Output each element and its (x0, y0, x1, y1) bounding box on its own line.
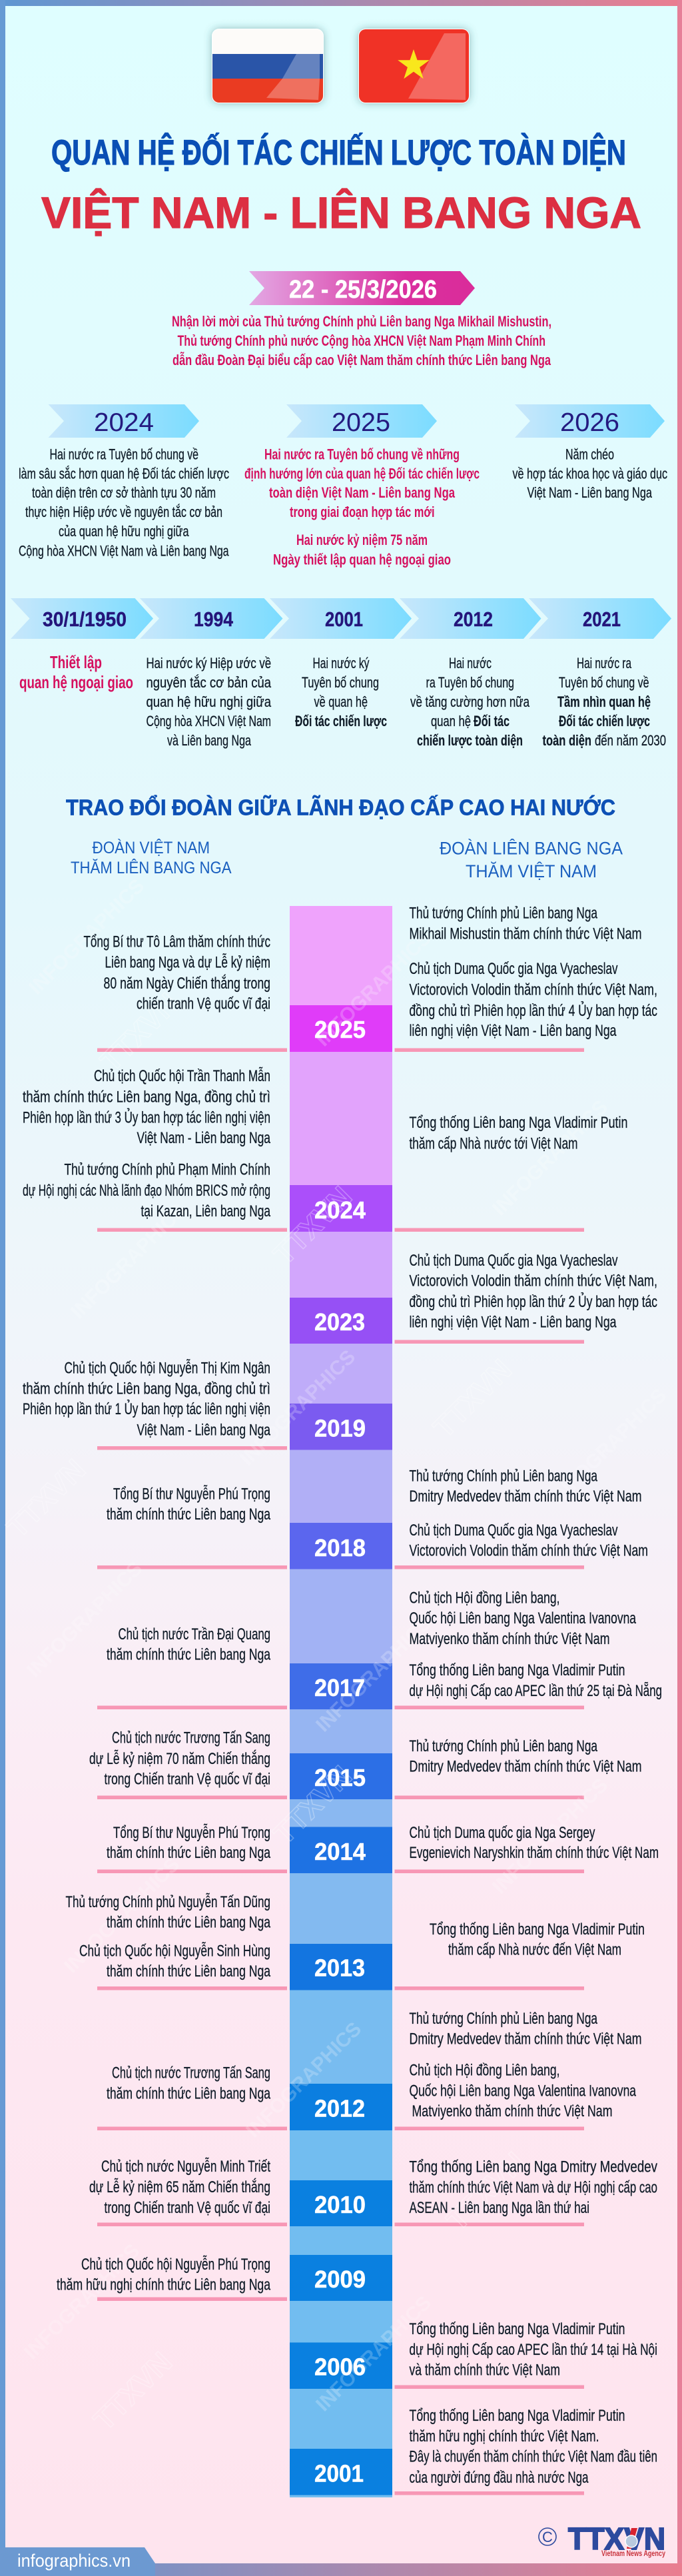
year 2001 (290, 2389, 392, 2497)
left visits: 2017: Chủ tịch nước Trần Đại Quang (119, 1625, 270, 1643)
left visits: 2024: Thủ tướng Chính phủ Phạm Minh Chính (64, 1160, 270, 1179)
icon: flag of Russia (212, 29, 324, 103)
panel: 2024: Cộng hòa XHCN Việt Nam và Liên bang Nga (19, 542, 229, 560)
watermarks: TTXVN (440, 2146, 531, 2237)
left visits: 2024: Chủ tịch Quốc hội Trần Thanh Mẫn (94, 1067, 270, 1085)
watermarks: TTXVN (267, 1180, 358, 1271)
panel: 2026 (513, 404, 667, 501)
column heading: Vietnam delegation: ĐOÀN VIỆT NAM (92, 838, 210, 857)
left visits: 2024: dự Hội nghị các Nhà lãnh đạo Nhóm BRICS mở rộng (23, 1182, 270, 1200)
panel: 2026: 2026 (560, 408, 619, 437)
panel: 2025: toàn diện Việt Nam - Liên bang Nga (269, 484, 456, 501)
year 2024: 2024 (314, 1196, 366, 1224)
panel: 2025: định hướng lớn của quan hệ Đối tác chiến lược (244, 465, 480, 482)
left visits: 2013: Thủ tướng Chính phủ Nguyễn Tấn Dũng (65, 1893, 270, 1911)
title (41, 132, 641, 237)
watermarks: INFOGRAPHICS (236, 1346, 360, 1470)
right visits: 2001: của người đứng đầu nhà nước Nga (409, 2469, 589, 2487)
panel: 2025: trong giai đoạn hợp tác mới (290, 504, 434, 520)
year 2023 (290, 1232, 392, 1344)
milestone: 2001: về quan hệ (314, 693, 368, 710)
panel: 2025: Ngày thiết lập quan hệ ngoại giao (273, 552, 451, 568)
milestone: 2001: Hai nước ký (313, 655, 369, 671)
right visits: 2006 (409, 2320, 657, 2379)
flags (212, 29, 470, 103)
milestone: 2012: 2012 (454, 608, 493, 631)
milestone: 2021 (529, 598, 671, 749)
milestone: 2021: 2021 (583, 608, 621, 631)
right visits: 2015: Thủ tướng Chính phủ Liên bang Nga (409, 1737, 597, 1755)
watermarks (1, 875, 671, 2437)
year 2013: 2013 (314, 1954, 365, 1981)
left visits: 2009 (57, 2256, 270, 2294)
left visits: 2015: dự Lễ kỷ niệm 70 năm Chiến thắng (89, 1750, 270, 1768)
left visits: 2013 (65, 1893, 270, 1980)
left visits: 2024: Việt Nam - Liên bang Nga (137, 1129, 270, 1147)
year 2024 (290, 1052, 392, 1232)
year 2006: 2006 (314, 2353, 366, 2381)
watermarks: INFOGRAPHICS (242, 2018, 366, 2142)
panel: 2024: của quan hệ hữu nghị giữa (59, 523, 189, 540)
title: VIỆT NAM - LIÊN BANG NGA (41, 188, 641, 237)
year 2015: 2015 (314, 1764, 366, 1791)
left visits: 2025: chiến tranh Vệ quốc vĩ đại (137, 995, 270, 1013)
watermarks: INFOGRAPHICS (312, 1612, 436, 1736)
milestone: 2021: Tầm nhìn quan hệ (557, 693, 651, 710)
right visits: 2014: Chủ tịch Duma quốc gia Nga Sergey (409, 1824, 595, 1842)
milestone: 2021: Hai nước ra (577, 655, 632, 671)
right visits: 2013 (430, 1921, 645, 1958)
year 2009: 2009 (314, 2266, 366, 2293)
right visits: 2014 (409, 1824, 659, 1862)
left visits: 2010: Chủ tịch nước Nguyễn Minh Triết (101, 2158, 270, 2176)
column heading: Vietnam delegation: THĂM LIÊN BANG NGA (71, 858, 232, 877)
milestone: 2001: 2001 (325, 608, 363, 631)
milestone: 2001: Tuyên bố chung (302, 674, 379, 691)
left visits: 2024: tại Kazan, Liên bang Nga (141, 1202, 270, 1220)
panel: 2025: Hai nước ra Tuyên bố chung về những (264, 446, 460, 462)
milestone: 2021: toàn diện (542, 732, 591, 749)
milestone: 2012: Hai nước (449, 655, 492, 671)
year 2010 (290, 2130, 392, 2226)
right visits: 2001: thăm hữu nghị chính thức Việt Nam. (409, 2427, 599, 2445)
right visits: 2025 (409, 905, 657, 1040)
intro text (172, 313, 551, 368)
year 2015 (290, 1709, 392, 1799)
year 2013 (290, 1873, 392, 1990)
milestone: 2012 (400, 598, 541, 749)
right visits: 2012: Chủ tịch Hội đồng Liên bang, (409, 2061, 559, 2080)
milestone: 2012: về tăng cường hơn nữa (410, 693, 530, 710)
left visits: 2024: Phiên họp lần thứ 3 Ủy ban hợp tác liên nghị viện (23, 1107, 270, 1127)
watermarks: INFOGRAPHICS (488, 1096, 612, 1220)
intro text: dẫn đầu Đoàn Đại biểu cấp cao Việt Nam thăm chính thức Liên bang Nga (172, 352, 551, 368)
panel: 2025: 2025 (332, 408, 390, 437)
right visits: 2018: Thủ tướng Chính phủ Liên bang Nga (409, 1467, 597, 1486)
year 2014: 2014 (314, 1838, 366, 1865)
column heading: Russia delegation: ĐOÀN LIÊN BANG NGA (440, 838, 623, 858)
left visits: 2018: thăm chính thức Liên bang Nga (107, 1505, 270, 1523)
year 2019 (290, 1344, 392, 1450)
left visits: 2025: 80 năm Ngày Chiến thắng trong (104, 975, 270, 993)
milestone: 1994: và Liên bang Nga (167, 732, 252, 749)
left visits: 2017: thăm chính thức Liên bang Nga (107, 1645, 270, 1664)
intro text: Nhận lời mời của Thủ tướng Chính phủ Liên bang Nga Mikhail Mishustin, (172, 313, 551, 330)
left visits: 2009: thăm hữu nghị chính thức Liên bang Nga (57, 2276, 270, 2294)
milestone: 1994: Hai nước ký Hiệp ước về (147, 655, 271, 671)
left visits: 2019: Việt Nam - Liên bang Nga (137, 1422, 270, 1439)
watermarks: TTXVN (94, 987, 185, 1078)
right visits: 2012 (409, 2010, 642, 2120)
watermarks: INFOGRAPHICS (60, 1853, 184, 1977)
right visits: 2012: Thủ tướng Chính phủ Liên bang Nga (409, 2010, 597, 2028)
year 2010: 2010 (314, 2191, 366, 2218)
year 2001: 2001 (314, 2459, 364, 2487)
column heading: Russia delegation (440, 838, 623, 881)
right visits: 2015 (409, 1737, 642, 1776)
left visits: 2010: trong Chiến tranh Vệ quốc vĩ đại (104, 2199, 270, 2217)
left visits: 2019 (23, 1359, 270, 1439)
milestone: 30/1/1950: 30/1/1950 (43, 608, 127, 631)
milestone: 30/1/1950 (11, 598, 153, 692)
right visits: 2025: Thủ tướng Chính phủ Liên bang Nga (409, 905, 597, 922)
year 2018 (290, 1450, 392, 1569)
left visits: 2025 (84, 933, 270, 1013)
left visits: 2009: Chủ tịch Quốc hội Nguyễn Phú Trọng (81, 2256, 270, 2274)
left visits: 2014: Tổng Bí thư Nguyễn Phú Trọng (113, 1824, 270, 1842)
right visits: 2010: ASEAN - Liên bang Nga lần thứ hai (409, 2199, 589, 2217)
left visits: 2024: thăm chính thức Liên bang Nga, đồng chủ trì (23, 1088, 270, 1106)
left visits: 2013: thăm chính thức Liên bang Nga (107, 1913, 270, 1932)
watermarks: INFOGRAPHICS (23, 1557, 147, 1681)
right visits: 2006: và thăm chính thức Việt Nam (409, 2361, 560, 2379)
milestone: 30/1/1950: quan hệ ngoại giao (19, 672, 133, 692)
watermarks: INFOGRAPHICS (25, 875, 149, 999)
left visits: 2015: trong Chiến tranh Vệ quốc vĩ đại (104, 1771, 270, 1788)
milestone: 2012: ra Tuyên bố chung (426, 674, 514, 691)
right visits: 2018 (409, 1467, 648, 1560)
right visits: 2017: Chủ tịch Hội đồng Liên bang, (409, 1589, 559, 1607)
icon: copyright: C (542, 2529, 553, 2545)
right visits: 2017: Matviyenko thăm chính thức Việt Nam (409, 1630, 610, 1648)
icon: copyright (539, 2528, 556, 2545)
left visits: 2014 (107, 1824, 270, 1862)
right visits: 2023 (409, 1252, 657, 1331)
left visits: 2012: thăm chính thức Liên bang Nga (107, 2085, 270, 2102)
panel: 2025 (244, 404, 480, 568)
year 2014 (290, 1799, 392, 1873)
right visits: 2017 (409, 1589, 662, 1700)
right visits: 2012: Matviyenko thăm chính thức Việt Nam (412, 2102, 613, 2120)
milestone: 2021: Tuyên bố chung về (559, 674, 649, 691)
milestone: 1994 (140, 598, 282, 749)
year 2017 (290, 1569, 392, 1709)
panel: 2025: Hai nước kỷ niệm 75 năm (296, 532, 428, 548)
watermarks: INFOGRAPHICS (547, 1384, 671, 1508)
milestone: 1994: 1994 (194, 608, 234, 631)
heading: exchanges: TRAO ĐỔI ĐOÀN GIỮA LÃNH ĐẠO CẤP CAO HAI NƯỚC (66, 795, 615, 819)
left visits: 2010 (89, 2158, 270, 2217)
panel: 2024: 2024 (94, 408, 154, 437)
left visits: 2025: Tổng Bí thư Tô Lâm thăm chính thức (84, 933, 270, 951)
watermarks: TTXVN (87, 2346, 178, 2437)
panel: 2024: Hai nước ra Tuyên bố chung về (49, 446, 198, 462)
date ribbon: 22 - 25/3/2026 (289, 276, 437, 304)
left visits: 2019: thăm chính thức Liên bang Nga, đồng chủ trì (23, 1380, 270, 1398)
watermarks: INFOGRAPHICS (67, 1199, 190, 1323)
left visits: 2017 (107, 1625, 270, 1664)
left visits: 2019: Phiên họp lần thứ 1 Ủy ban hợp tác liên nghị viện (23, 1399, 270, 1418)
watermarks: INFOGRAPHICS (488, 1774, 612, 1898)
dividers (97, 1049, 584, 2495)
year 2009 (290, 2226, 392, 2301)
milestone: 2012: quan hệ (431, 713, 471, 729)
watermarks: TTXVN (1, 1453, 92, 1544)
milestone: 2001: Đối tác chiến lược (295, 713, 387, 729)
milestone: 30/1/1950: Thiết lập (50, 652, 102, 672)
left visits: 2015 (89, 1729, 270, 1788)
year 2017: 2017 (314, 1674, 365, 1701)
left visits: 2015: Chủ tịch nước Trương Tấn Sang (112, 1729, 270, 1747)
milestone: 1994: nguyên tắc cơ bản của (147, 674, 272, 691)
left visits: 2013: thăm chính thức Liên bang Nga (107, 1962, 270, 1980)
left visits: 2018: Tổng Bí thư Nguyễn Phú Trọng (113, 1486, 270, 1503)
left visits: 2018 (107, 1486, 270, 1523)
year 2006 (290, 2301, 392, 2389)
footer tab: infographics.vn: infographics.vn (17, 2551, 131, 2571)
year 2019: 2019 (314, 1415, 366, 1442)
panel: 2024: toàn diện trên cơ sở thành tựu 30 năm (32, 484, 216, 501)
year 2025: 2025 (314, 1016, 366, 1043)
right visits: 2001 (409, 2407, 657, 2487)
date ribbon (249, 271, 475, 305)
milestone: 2001 (270, 598, 412, 729)
left visits: 2010: dự Lễ kỷ niệm 65 năm Chiến thắng (89, 2178, 270, 2196)
year 2012 (290, 1990, 392, 2130)
left visits: 2012: Chủ tịch nước Trương Tấn Sang (112, 2064, 270, 2082)
year 2012: 2012 (314, 2094, 365, 2122)
watermarks: TTXVN (267, 1759, 358, 1851)
year 2025 (290, 906, 392, 1052)
year 2018: 2018 (314, 1534, 366, 1561)
watermarks: TTXVN (427, 1353, 518, 1444)
milestone: 2012: Đối tác (474, 713, 510, 729)
watermarks: INFOGRAPHICS (312, 2292, 436, 2415)
central timeline column (290, 906, 392, 2497)
year 2023: 2023 (314, 1308, 365, 1336)
milestone: 1994: quan hệ hữu nghị giữa (147, 693, 272, 710)
left visits: 2014: thăm chính thức Liên bang Nga (107, 1844, 270, 1862)
column heading: Russia delegation: THĂM VIỆT NAM (466, 861, 597, 881)
panel: 2024: làm sâu sắc hơn quan hệ Đối tác chiến lược (19, 465, 229, 482)
watermarks: INFOGRAPHICS (312, 927, 436, 1051)
icon: flag of Vietnam (358, 29, 470, 103)
footer tab: infographics.vn (0, 2547, 155, 2576)
milestone: 2012: chiến lược toàn diện (417, 732, 523, 749)
left visits: 2019: Chủ tịch Quốc hội Nguyễn Thị Kim Ngân (64, 1359, 270, 1378)
right visits: 2010 (409, 2158, 658, 2217)
column heading: Vietnam delegation (71, 838, 232, 877)
right visits: 2024 (409, 1114, 627, 1152)
right visits: 2024: thăm cấp Nhà nước tới Việt Nam (409, 1135, 578, 1152)
watermarks: INFOGRAPHICS (20, 2240, 144, 2363)
milestone: 1994: Cộng hòa XHCN Việt Nam (147, 713, 271, 729)
left visits: 2024 (23, 1067, 270, 1220)
logo: TTXVN: TTXVN (568, 2521, 665, 2556)
left visits: 2013: Chủ tịch Quốc hội Nguyễn Sinh Hùng (79, 1942, 270, 1960)
panel: 2024: thực hiện Hiệp ước về nguyên tắc cơ bản (25, 504, 222, 520)
icon: globe (625, 2528, 637, 2549)
panel: 2026: Năm chéo (565, 446, 614, 462)
intro text: Thủ tướng Chính phủ nước Cộng hòa XHCN Việt Nam Phạm Minh Chính (177, 332, 545, 349)
left visits: 2012 (107, 2064, 270, 2102)
left visits: 2025: Liên bang Nga và dự Lễ kỷ niệm (105, 954, 270, 971)
panel: 2024 (19, 404, 229, 560)
